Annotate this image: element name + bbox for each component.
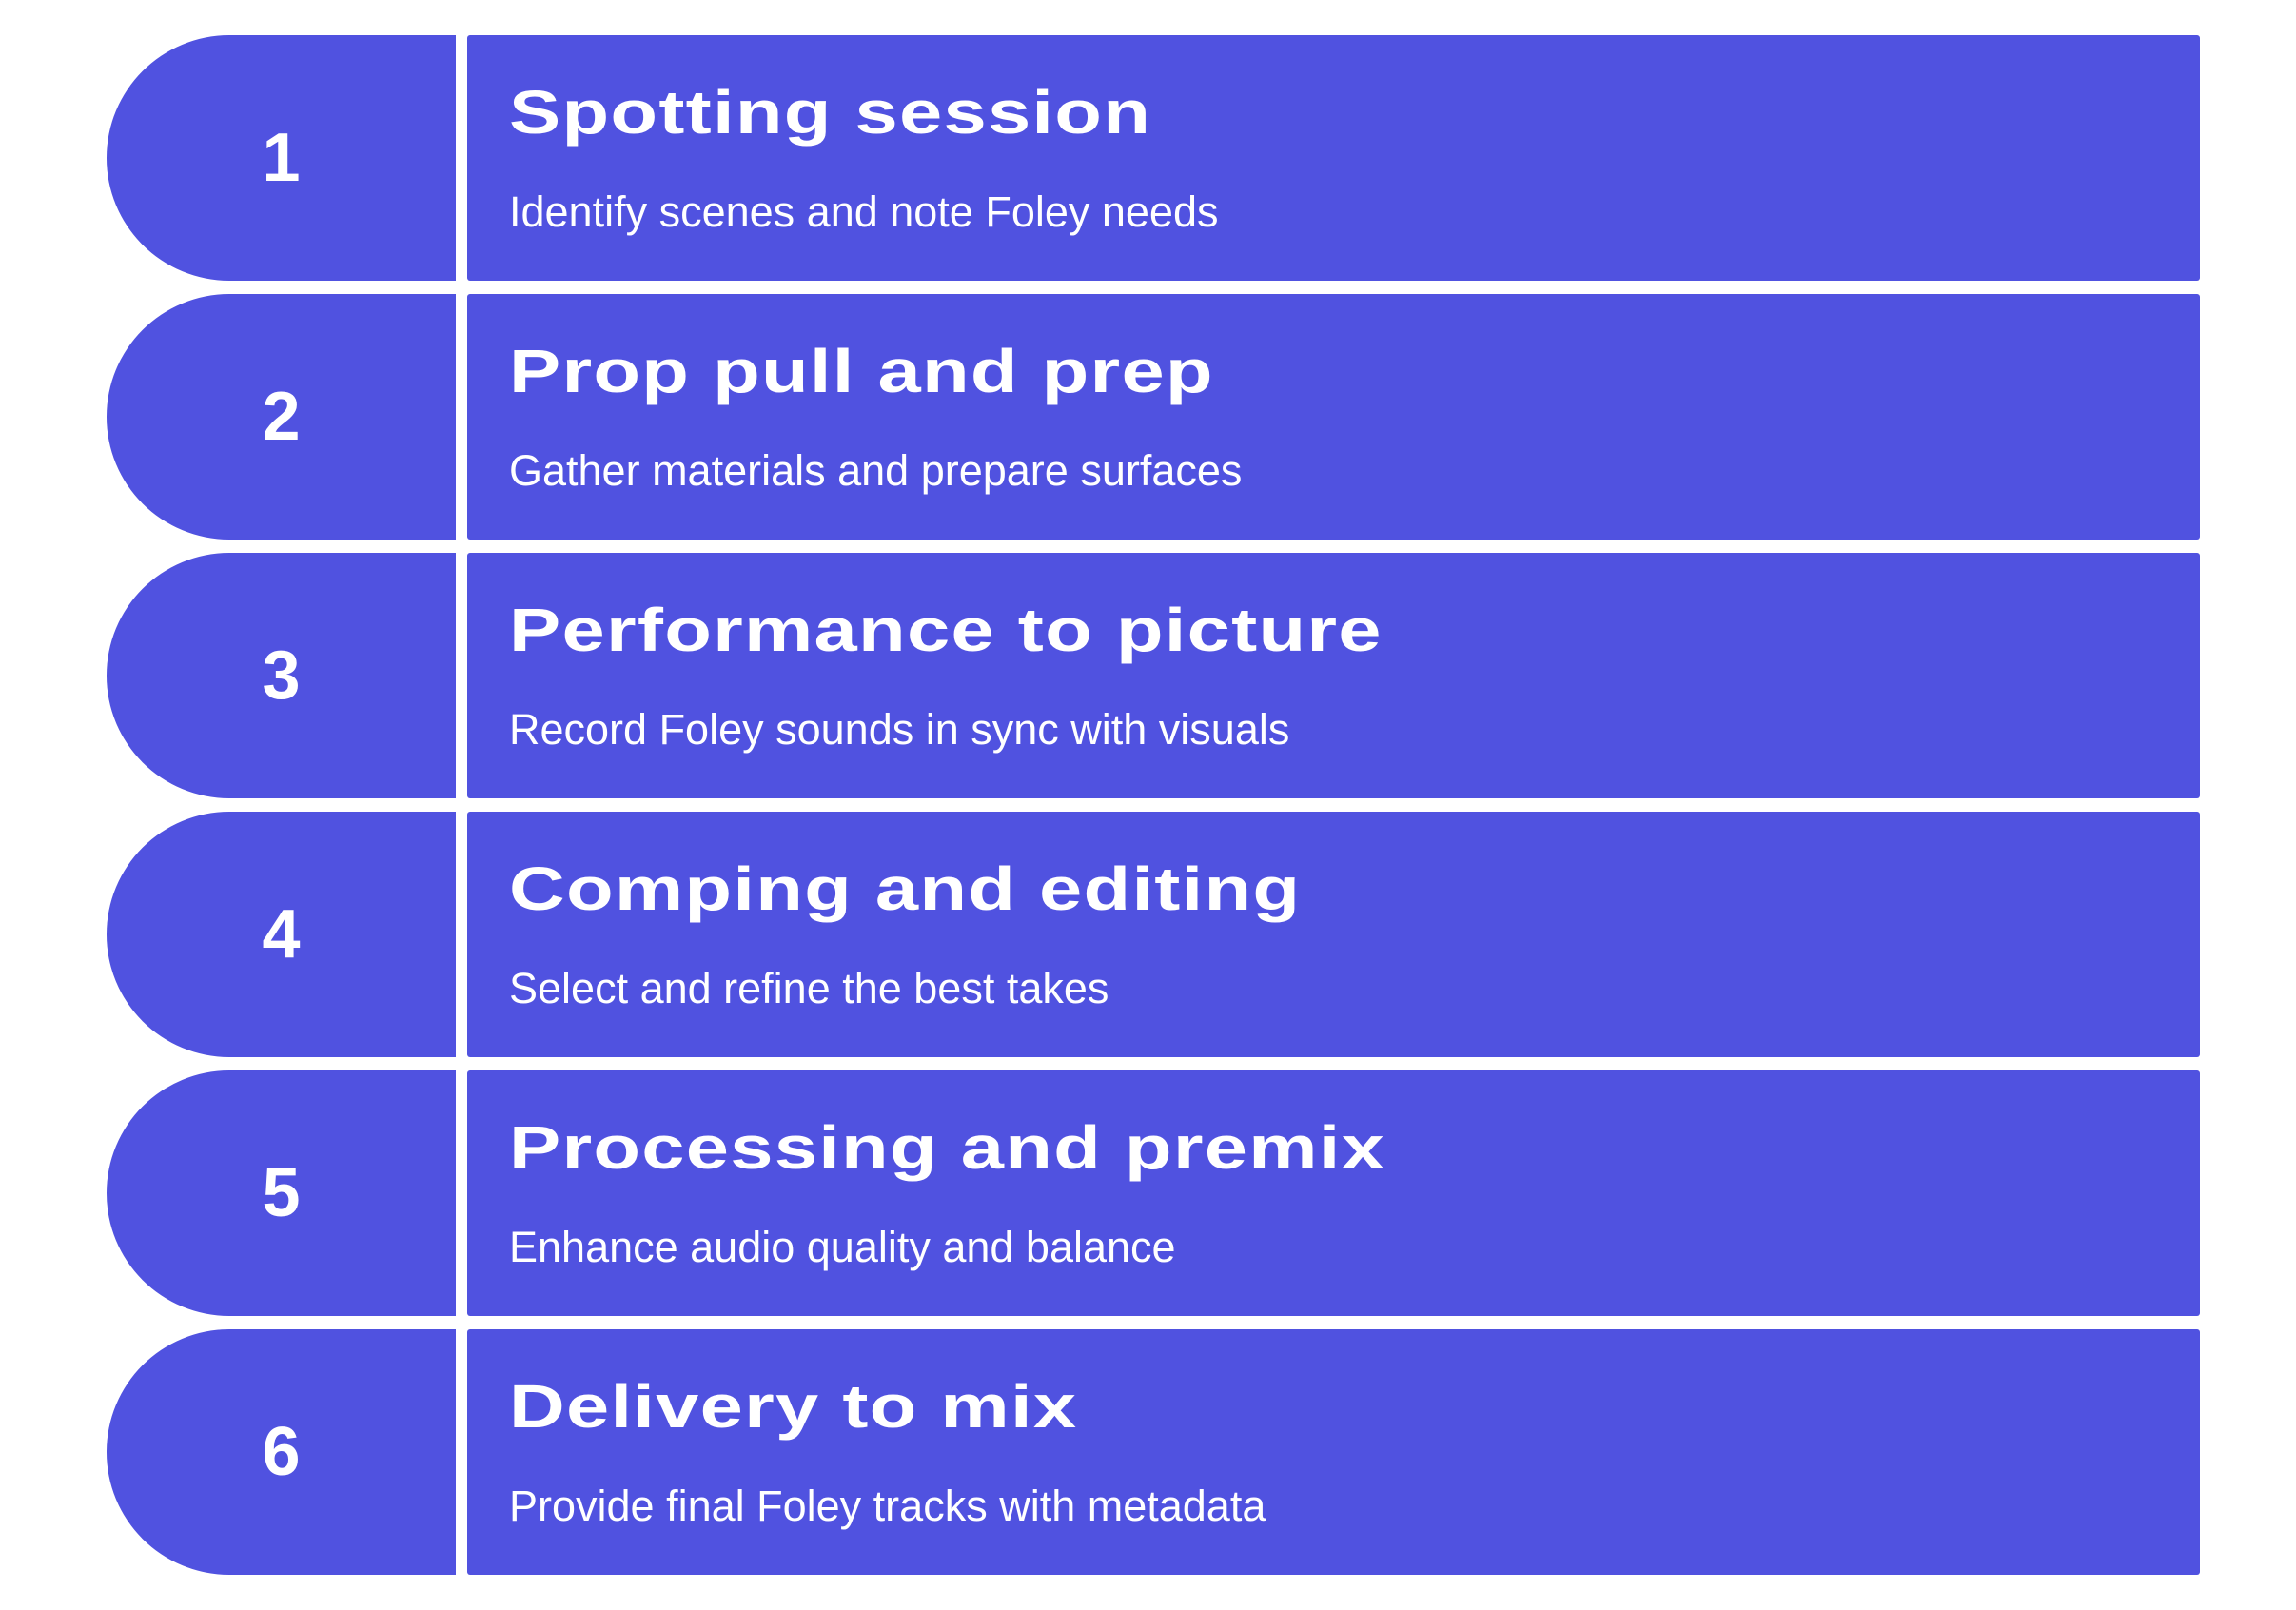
- title 2: Prop pull and prep: [509, 337, 1214, 405]
- card 5: [467, 1070, 2200, 1316]
- title 1: Spotting session: [509, 78, 1151, 147]
- title 5: Processing and premix: [509, 1113, 1385, 1182]
- card 3: [467, 553, 2200, 798]
- number pill 3: [107, 553, 456, 798]
- step 5: [107, 1070, 2200, 1316]
- title 4: Comping and editing: [509, 854, 1301, 923]
- step 1: [107, 35, 2200, 281]
- description 4: Select and refine the best takes: [509, 964, 1109, 1012]
- step 6: [107, 1329, 2200, 1575]
- number pill 4: 4: [262, 896, 301, 972]
- description 5: Enhance audio quality and balance: [509, 1223, 1176, 1271]
- number pill 6: 6: [262, 1414, 301, 1490]
- number pill 4: [107, 812, 456, 1057]
- number pill 1: 1: [262, 120, 301, 196]
- description 6: Provide final Foley tracks with metadata: [509, 1482, 1266, 1530]
- number pill 2: [107, 294, 456, 540]
- card 1: [467, 35, 2200, 281]
- card 6: [467, 1329, 2200, 1575]
- title 3: Performance to picture: [509, 596, 1383, 664]
- description 1: Identify scenes and note Foley needs: [509, 187, 1218, 236]
- description 3: Record Foley sounds in sync with visuals: [509, 705, 1289, 754]
- card 4: [467, 812, 2200, 1057]
- number pill 3: 3: [262, 638, 301, 714]
- title 6: Delivery to mix: [509, 1372, 1077, 1441]
- number pill 5: [107, 1070, 456, 1316]
- step 2: [107, 294, 2200, 540]
- number pill 2: 2: [262, 379, 301, 455]
- card 2: [467, 294, 2200, 540]
- description 2: Gather materials and prepare surfaces: [509, 446, 1242, 495]
- number pill 5: 5: [262, 1155, 301, 1231]
- step 4: [107, 812, 2200, 1057]
- step 3: [107, 553, 2200, 798]
- number pill 1: [107, 35, 456, 281]
- number pill 6: [107, 1329, 456, 1575]
